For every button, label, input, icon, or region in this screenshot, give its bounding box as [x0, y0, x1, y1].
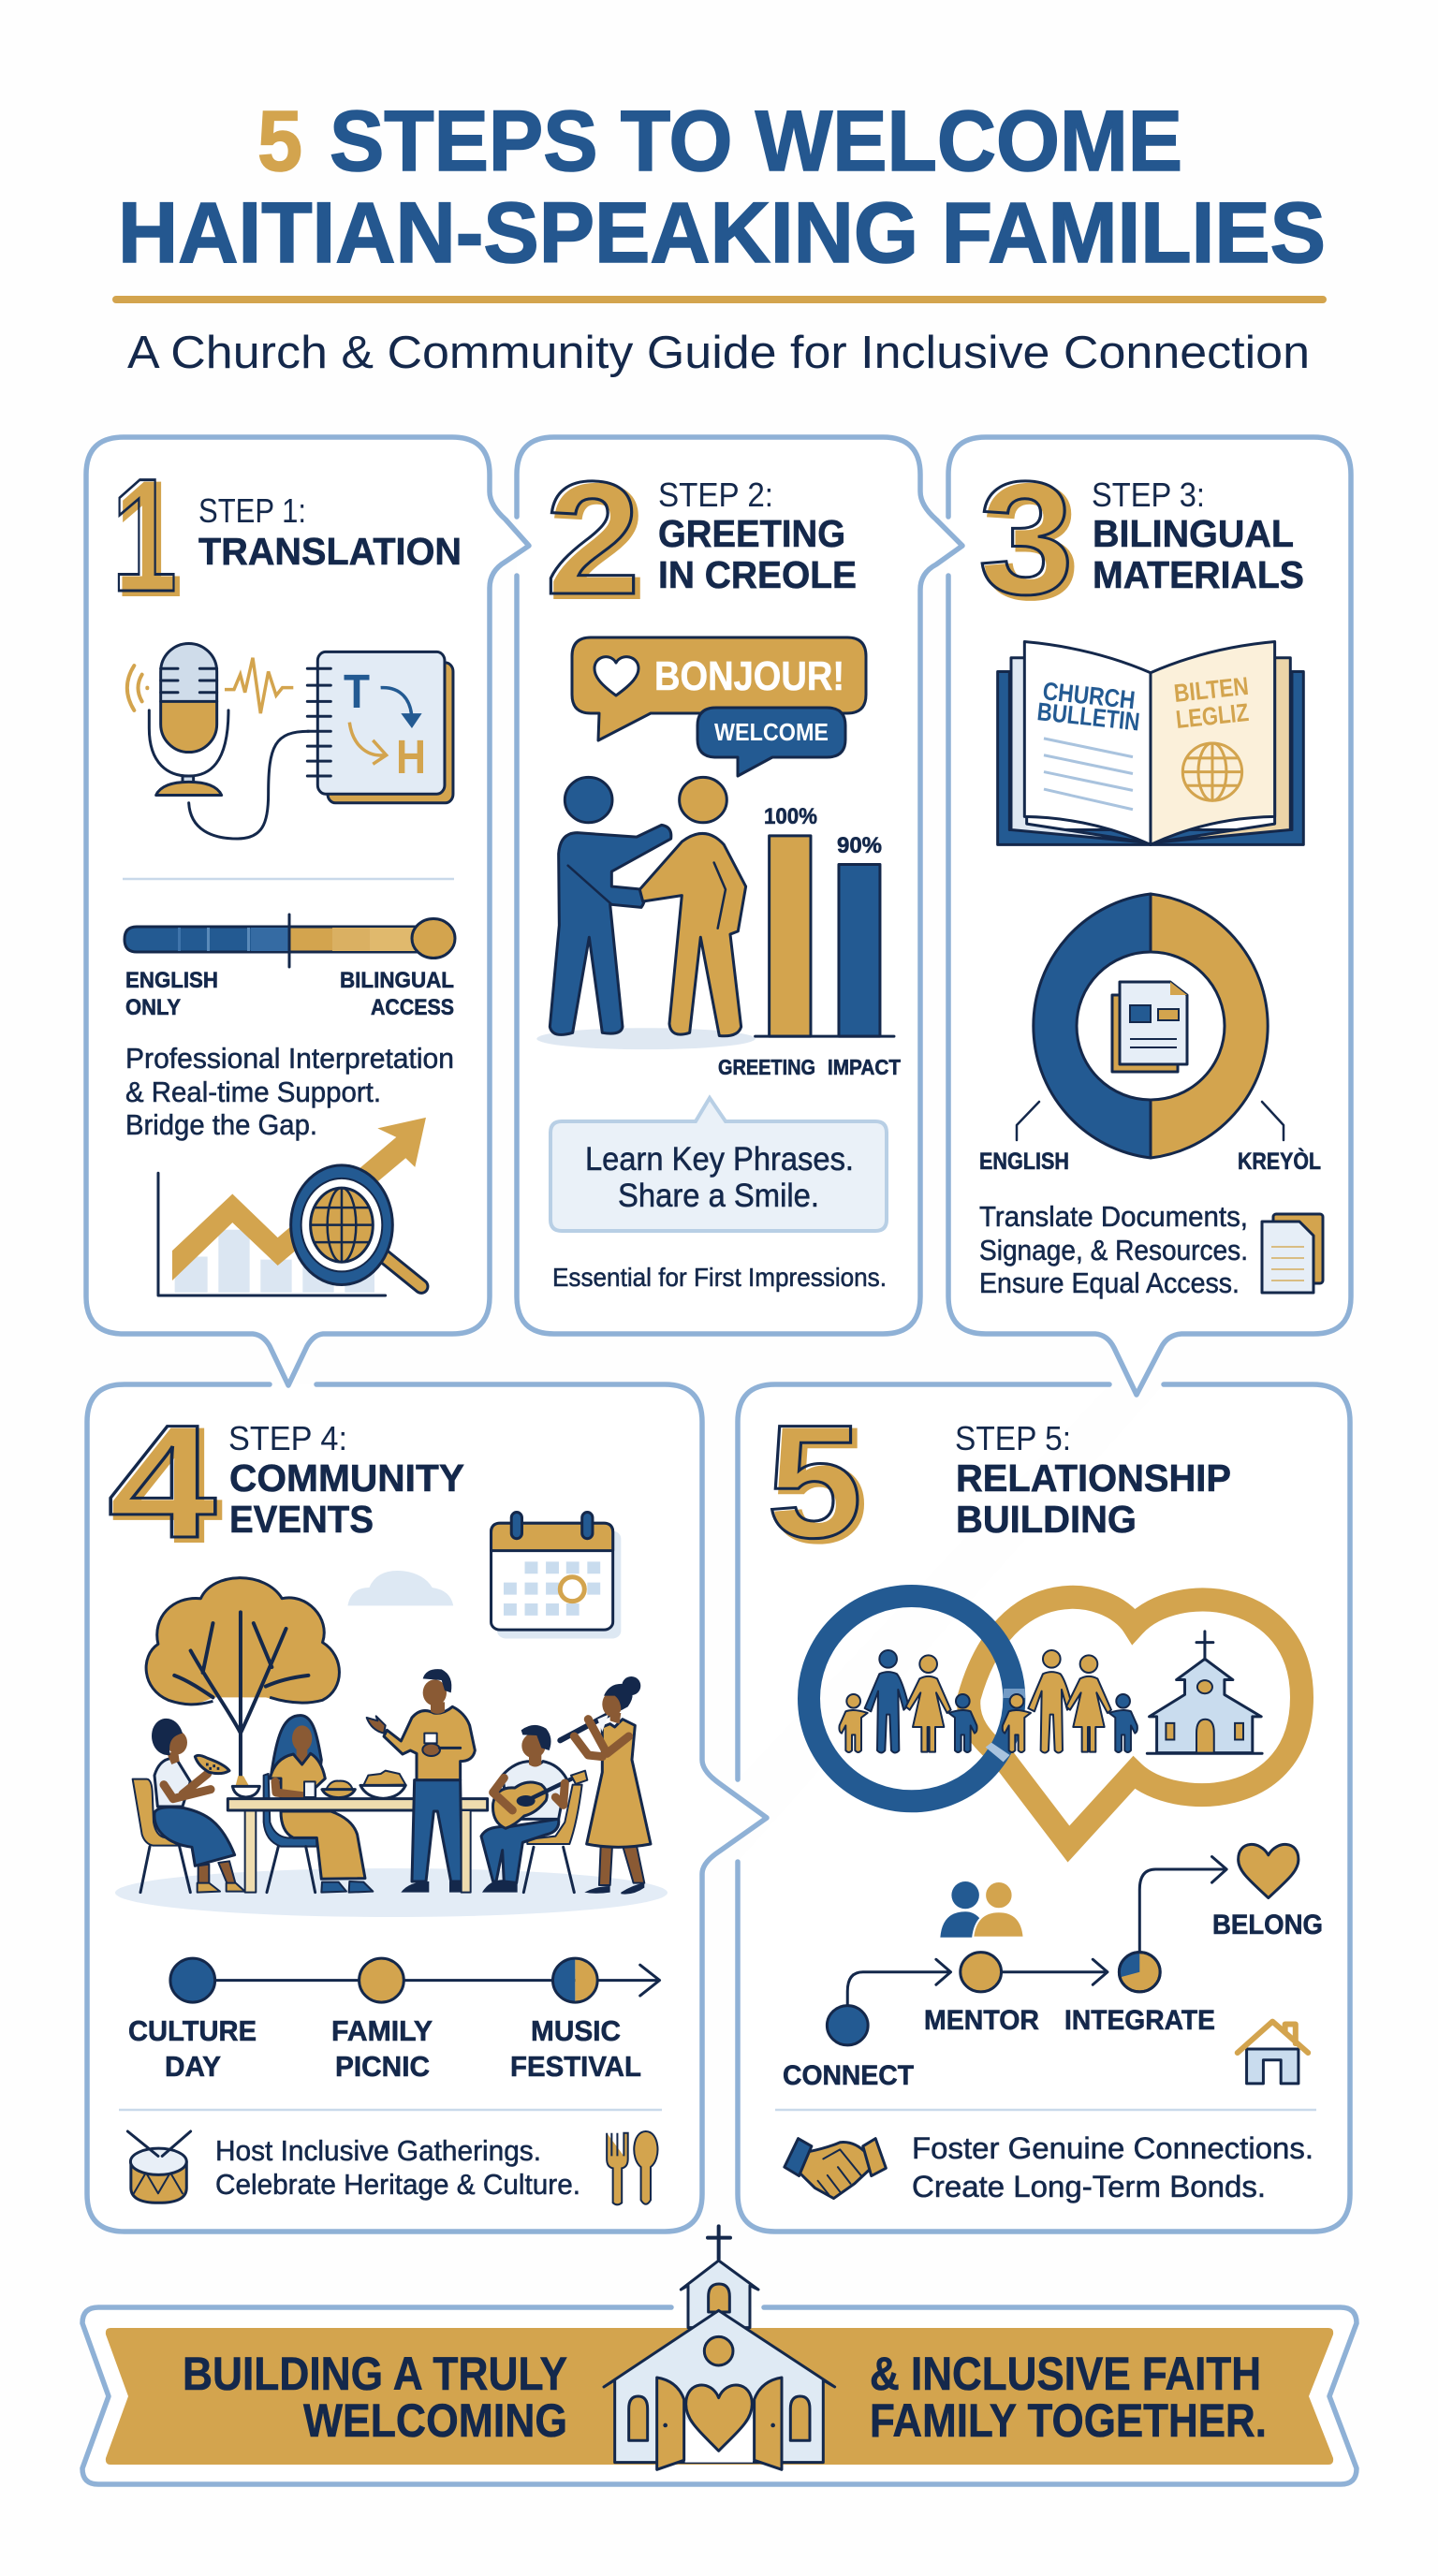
icon: translation notebook: T — [344, 665, 370, 718]
gold heart outline — [969, 1597, 1301, 1844]
step 2 numeral: 2 — [550, 452, 645, 632]
integrate node — [1119, 1953, 1160, 1992]
blue bar — [839, 864, 880, 1036]
cable — [189, 731, 309, 839]
family picnic node — [360, 1958, 404, 2002]
step 5 description — [912, 2131, 1313, 2203]
journey path: BELONG — [1212, 1910, 1323, 1940]
step 1 numeral: 1 — [111, 446, 177, 625]
mentor people icon — [951, 1881, 979, 1909]
ground shadow — [536, 1028, 756, 1049]
step 3 heading: STEP 3: — [1092, 476, 1205, 514]
panel 2 border — [517, 437, 962, 1334]
seated guitarist — [481, 1725, 587, 1893]
step 4 description: Celebrate Heritage & Culture. — [215, 2168, 580, 2201]
banner text right: & INCLUSIVE FAITH — [870, 2348, 1261, 2400]
speech bubble: bonjour: BONJOUR! — [654, 653, 844, 699]
closing banner — [82, 2226, 1357, 2484]
step 2 heading: IN CREOLE — [658, 553, 857, 596]
bar labels: GREETING — [718, 1055, 815, 1079]
speech bubble: welcome: WELCOME — [714, 718, 829, 746]
step 1 description: Bridge the Gap. — [125, 1108, 317, 1141]
icon: calendar — [492, 1513, 621, 1639]
right door — [755, 2378, 782, 2469]
step 3 heading — [1092, 476, 1304, 596]
step 5 heading: RELATIONSHIP — [956, 1456, 1231, 1500]
bar labels: 90% — [837, 833, 882, 858]
step 1 heading: TRANSLATION — [198, 530, 462, 573]
step 3 numeral: 3 — [983, 452, 1078, 632]
speech bubble: welcome — [697, 708, 845, 776]
step 4 heading: EVENTS — [229, 1498, 374, 1541]
donut chart — [979, 894, 1321, 1175]
music festival node — [575, 1958, 597, 2002]
panel: step 4 community events — [87, 1384, 767, 2232]
event timeline: PICNIC — [335, 2050, 430, 2083]
icon: open bilingual book: BILTEN — [1172, 672, 1250, 708]
step 2 heading — [658, 476, 857, 596]
steeple — [681, 2261, 758, 2328]
panel 5 border — [738, 1384, 1350, 2232]
seated woman eating — [133, 1719, 245, 1893]
waveform — [225, 658, 293, 713]
bar labels — [718, 804, 901, 1079]
standing man with cup — [367, 1669, 475, 1893]
icon: church with open doors — [604, 2226, 835, 2469]
icon: translation notebook — [307, 651, 453, 803]
callout: learn key phrases: Learn Key Phrases. — [585, 1141, 854, 1178]
cross — [708, 2226, 730, 2259]
ground — [115, 1868, 668, 1917]
magnifier lens — [291, 1165, 392, 1284]
callout: learn key phrases — [550, 1098, 887, 1231]
step 1 numeral: 1 — [116, 449, 182, 629]
icon: heart — [594, 657, 638, 695]
panel: step 1 translation — [86, 437, 529, 1385]
step 1 description: & Real-time Support. — [125, 1076, 381, 1108]
step 2 numeral: 2 — [545, 448, 640, 628]
step 1 heading — [198, 491, 462, 573]
donut chart: KREYÒL — [1238, 1147, 1321, 1175]
icon: fork and spoon — [607, 2131, 657, 2204]
step 3 heading: BILINGUAL — [1093, 512, 1294, 555]
banner outline — [82, 2307, 1357, 2484]
event timeline: DAY — [165, 2050, 221, 2083]
ring overlap highlights — [986, 1743, 1010, 1762]
icon: open bilingual book: BULLETIN — [1035, 697, 1141, 736]
bar labels: 100% — [764, 804, 817, 829]
growth chart with magnifier — [158, 1118, 426, 1295]
heart — [686, 2385, 752, 2451]
home icon — [1247, 2049, 1299, 2084]
panel: step 5 relationship building — [738, 1384, 1350, 2232]
standing flute player — [560, 1676, 651, 1895]
step 5 heading: STEP 5: — [955, 1419, 1071, 1457]
doorway opening — [685, 2418, 753, 2463]
step 2 heading: GREETING — [658, 512, 845, 555]
title rule — [112, 296, 1327, 303]
step 3 description: Ensure Equal Access. — [979, 1266, 1240, 1299]
step 5 heading — [955, 1419, 1231, 1541]
round window — [704, 2336, 733, 2365]
banner text left — [183, 2348, 567, 2447]
step 3 description: Translate Documents, — [979, 1200, 1248, 1233]
slider labels: ENGLISH — [125, 968, 218, 993]
family 2 — [1003, 1650, 1137, 1752]
event timeline — [128, 1958, 660, 2083]
step 3 heading: MATERIALS — [1093, 553, 1304, 596]
icon: handshake — [785, 2139, 886, 2199]
far table leg — [245, 1810, 256, 1893]
belong heart — [1239, 1844, 1299, 1898]
step 4 description — [215, 2134, 580, 2201]
slider labels — [125, 968, 454, 1020]
event timeline: FAMILY — [331, 2014, 433, 2047]
donut leaders — [1017, 1102, 1284, 1140]
journey path — [783, 1844, 1323, 2091]
banner text right: FAMILY TOGETHER. — [870, 2394, 1267, 2447]
mentor node — [961, 1953, 1002, 1992]
church — [1147, 1632, 1262, 1753]
panel 1 border — [86, 437, 529, 1385]
culture day node — [170, 1958, 215, 2002]
donut chart: ENGLISH — [979, 1149, 1069, 1175]
step 4 heading: COMMUNITY — [229, 1456, 464, 1500]
donut center document icon — [1112, 982, 1187, 1072]
magnifier handle — [381, 1253, 421, 1286]
step 5 numeral: 5 — [767, 1392, 862, 1572]
side windows — [629, 2396, 648, 2440]
step 3 description: Signage, & Resources. — [979, 1234, 1248, 1266]
step 4 heading: STEP 4: — [228, 1419, 347, 1457]
step 4 description: Host Inclusive Gatherings. — [215, 2134, 541, 2167]
event timeline: MUSIC — [531, 2014, 621, 2047]
banner text right — [870, 2348, 1267, 2447]
church body — [604, 2310, 835, 2463]
title: 5 — [257, 94, 302, 189]
note: first impressions: Essential for First Impressions. — [552, 1263, 887, 1292]
family 1 — [839, 1650, 977, 1752]
gold person — [639, 777, 746, 1036]
connect node — [827, 2006, 868, 2045]
step 4 numeral: 4 — [108, 1392, 216, 1572]
event timeline: FESTIVAL — [510, 2050, 641, 2083]
step 1 description: Professional Interpretation — [125, 1042, 454, 1075]
gold trend arrow — [172, 1118, 426, 1281]
step 5 heading: BUILDING — [956, 1498, 1137, 1541]
tree — [146, 1578, 339, 1785]
icon: cloud — [347, 1571, 453, 1605]
panel: step 2 greeting in creole — [517, 437, 962, 1334]
step 1 description — [125, 1042, 454, 1141]
banner text left: BUILDING A TRULY — [183, 2348, 567, 2400]
slider labels: BILINGUAL — [340, 968, 454, 993]
icon: translation notebook: H — [396, 730, 426, 783]
step 5 description: Foster Genuine Connections. — [912, 2131, 1313, 2165]
callout: learn key phrases: Share a Smile. — [618, 1178, 819, 1214]
step 5 numeral: 5 — [771, 1396, 867, 1575]
step 3 description — [979, 1200, 1248, 1299]
journey path: MENTOR — [924, 2005, 1039, 2036]
slider labels: ONLY — [125, 995, 181, 1020]
journey labels: CONNECT — [783, 2060, 914, 2091]
bar labels: IMPACT — [828, 1055, 901, 1079]
gold ribbon — [106, 2328, 1333, 2465]
title: STEPS TO WELCOME — [330, 94, 1182, 189]
venn: families and heart — [809, 1596, 1301, 1844]
gold bar — [770, 836, 811, 1036]
step 3 numeral: 3 — [978, 448, 1074, 628]
journey path: INTEGRATE — [1064, 2005, 1215, 2036]
icon: drum — [127, 2131, 191, 2203]
step 1 heading: STEP 1: — [198, 491, 306, 530]
greeting figures — [536, 777, 894, 1049]
step 5 description: Create Long-Term Bonds. — [912, 2170, 1266, 2203]
step 4 numeral: 4 — [112, 1396, 221, 1575]
step 2 heading: STEP 2: — [658, 476, 773, 514]
subtitle: A Church & Community Guide for Inclusive Connection — [127, 328, 1310, 378]
icon: stacked documents — [1262, 1214, 1323, 1293]
picnic scene — [115, 1513, 668, 1917]
panel 4 border — [87, 1384, 767, 2232]
icon: open bilingual book — [998, 642, 1303, 844]
title — [118, 94, 1326, 281]
table with food — [227, 1771, 488, 1893]
title: HAITIAN-SPEAKING FAMILIES — [118, 185, 1326, 281]
timeline labels: CULTURE — [128, 2014, 257, 2047]
speech bubble: bonjour — [572, 637, 866, 740]
book text: CHURCH — [1041, 677, 1137, 714]
progress slider — [125, 915, 455, 967]
chart bars — [175, 1230, 374, 1293]
slider labels: ACCESS — [371, 995, 454, 1020]
blue person — [550, 777, 671, 1034]
panel: step 3 bilingual materials — [948, 437, 1351, 1395]
connectors — [847, 1857, 1226, 2008]
icon: open bilingual book: LEGLIZ — [1174, 698, 1250, 734]
blue ring — [809, 1596, 1014, 1801]
banner text left: WELCOMING — [303, 2394, 567, 2447]
seated woman with headscarf — [264, 1716, 373, 1893]
step 4 heading — [228, 1419, 464, 1541]
sound waves — [127, 666, 147, 710]
left door — [657, 2378, 684, 2469]
icon: microphone — [127, 643, 309, 839]
panel 3 border — [948, 437, 1351, 1395]
